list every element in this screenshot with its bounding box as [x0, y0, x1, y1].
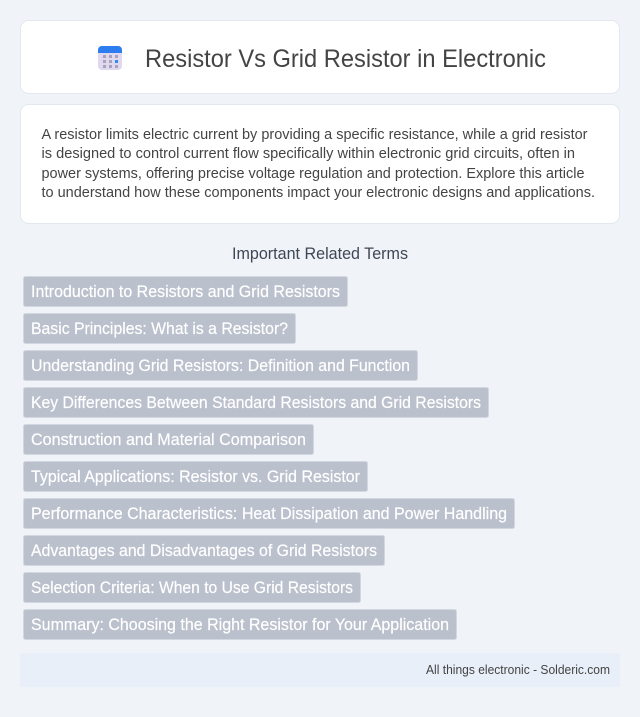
text block: description: A resistor limits electric current by providing a specific resistance, while a grid resistor — [42, 126, 588, 143]
chip: introduction: Introduction to Resistors and Grid Resistors — [31, 282, 340, 301]
chip: understanding grid resistors — [24, 350, 418, 380]
panel: title card — [20, 20, 620, 94]
chip: key differences: Key Differences Between Standard Resistors and Grid Resistors — [31, 393, 481, 412]
text block: description — [42, 126, 595, 201]
chip: understanding grid resistors: Understanding Grid Resistors: Definition and Function — [31, 356, 410, 375]
list: related term chips — [24, 276, 514, 640]
text block: description: is designed to control current flow specifically within electronic grid circuits, often in — [42, 145, 575, 162]
heading: important related terms: Important Related Terms — [232, 245, 408, 263]
chip: summary: Summary: Choosing the Right Resistor for Your Application — [31, 615, 449, 634]
chip: advantages — [24, 536, 384, 566]
chip: typical applications: Typical Applications: Resistor vs. Grid Resistor — [31, 467, 360, 486]
chip: selection criteria: Selection Criteria: When to Use Grid Resistors — [31, 578, 353, 597]
icon: calendar — [98, 46, 122, 70]
title: Resistor Vs Grid Resistor in Electronic — [145, 45, 546, 73]
text block: description: power systems, offering precise voltage regulation and protection. Explore this article — [42, 165, 584, 182]
chip: basic principles: Basic Principles: What is a Resistor? — [31, 319, 288, 338]
text block: description: to understand how these components impact your electronic designs and applications. — [42, 184, 595, 201]
chip: introduction — [24, 276, 348, 306]
footer — [20, 653, 620, 687]
chip: advantages: Advantages and Disadvantages of Grid Resistors — [31, 541, 377, 560]
panel: introduction — [20, 104, 620, 224]
chip: construction: Construction and Material Comparison — [31, 430, 306, 449]
chip: construction — [24, 424, 314, 454]
chip: basic principles — [24, 314, 296, 344]
chip: selection criteria — [24, 572, 360, 602]
chip: summary — [24, 610, 456, 640]
chip: typical applications — [24, 462, 368, 492]
chip: performance characteristics: Performance Characteristics: Heat Dissipation and Power Handling — [31, 504, 507, 523]
footer: All things electronic - Solderic.com — [426, 663, 610, 677]
chip: key differences — [24, 388, 488, 418]
chip: performance characteristics — [24, 498, 514, 528]
